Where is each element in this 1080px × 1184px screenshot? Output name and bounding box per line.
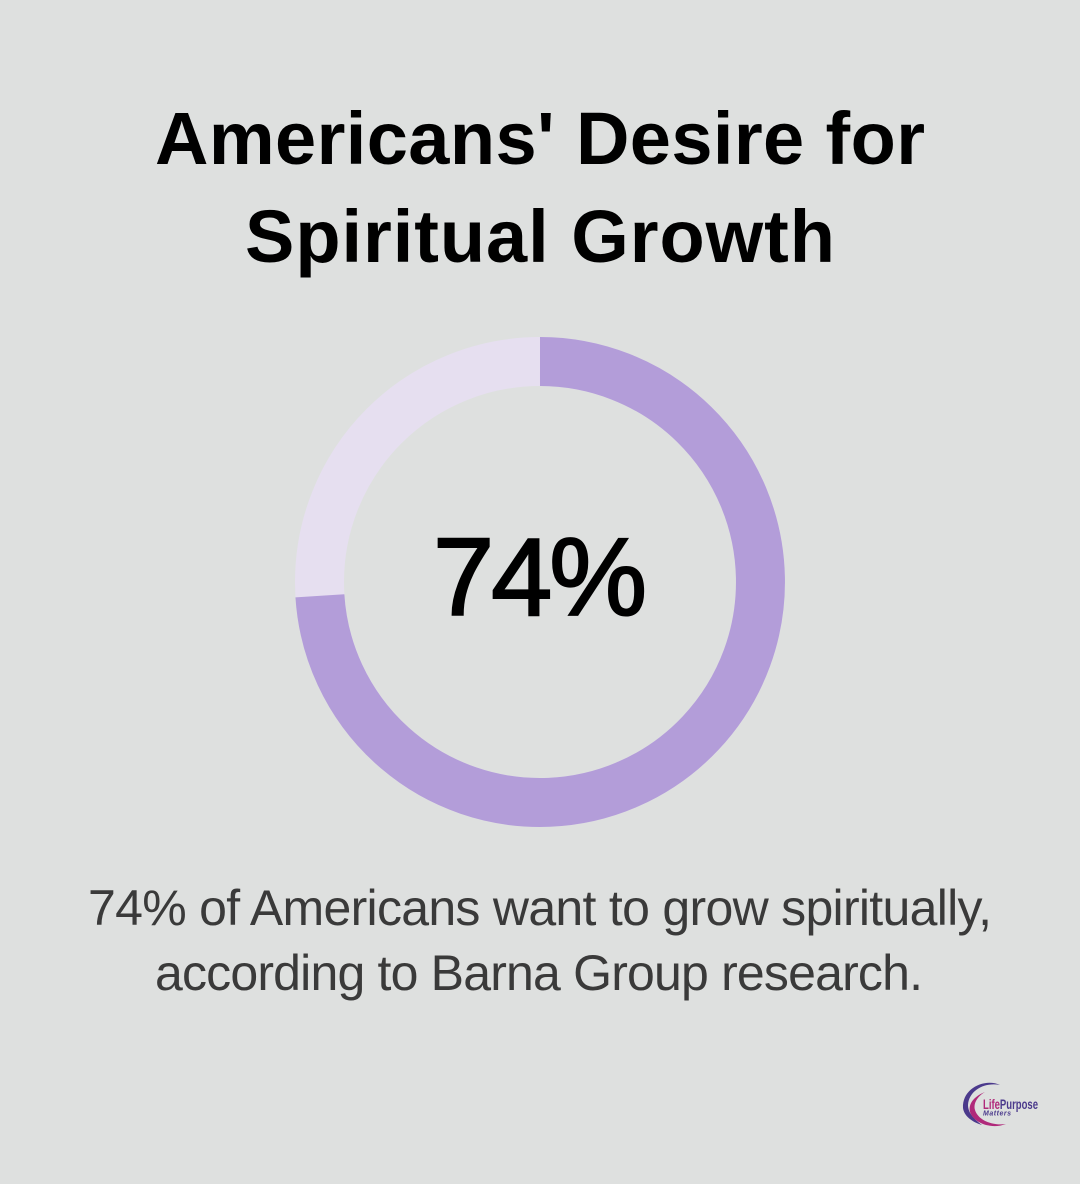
donut track [320, 362, 760, 802]
donut chart: 74% [320, 362, 760, 803]
title [155, 97, 925, 278]
donut value arc [320, 362, 760, 803]
title: Spiritual Growth [245, 195, 835, 278]
logo: Life Purpose Matters: Matters [983, 1110, 1011, 1118]
description text: according to Barna Group research. [155, 945, 923, 1001]
logo: Life Purpose Matters [963, 1083, 1038, 1126]
description text: 74% of Americans want to grow spiritually, [88, 880, 992, 936]
description text [88, 880, 992, 1001]
logo inner arc [970, 1092, 1006, 1126]
logo wordmark: LifePurpose [983, 1096, 1038, 1112]
center value: 74% [433, 516, 647, 639]
logo outer arc [963, 1083, 1000, 1125]
title: Americans' Desire for [155, 97, 925, 180]
